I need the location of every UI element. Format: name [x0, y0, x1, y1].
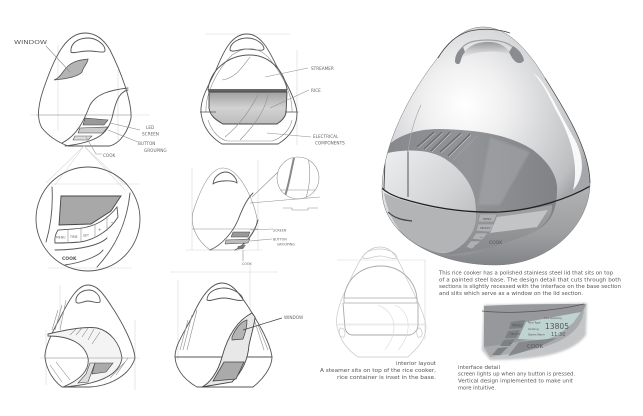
interface detail image [482, 303, 587, 360]
interface labels: MENU [512, 324, 523, 328]
interface labels: 13805 [545, 322, 569, 331]
sketch labels: led screen, button grouping, cook: GROUPING [144, 148, 167, 153]
labels: steamer, rice, electrical components: STREAMER [311, 66, 334, 71]
sketch: cooker front with window [14, 33, 150, 185]
caption: interface detail: screen lights up when any button is pressed. [458, 372, 575, 378]
description text: and slits which serve as a window on the lid section. [439, 291, 583, 297]
base slot [388, 212, 412, 221]
labels: interface buttons: TIME [69, 235, 78, 239]
sketch labels: led screen, button grouping, cook [103, 125, 167, 158]
interface screen [518, 312, 581, 340]
handle [438, 29, 524, 64]
interface labels [509, 317, 569, 350]
labels: screen, button grouping, cook: BUTTON [273, 238, 287, 242]
interface buttons [466, 214, 497, 249]
sketch labels: led screen, button grouping, cook: COOK [103, 153, 116, 158]
description text: of a painted steel base. The design detail that cuts through both [439, 278, 621, 284]
interface labels: COOK [527, 344, 543, 350]
labels: screen, button grouping, cook: GROUPING [277, 242, 295, 246]
labels: interface buttons: + [98, 227, 102, 232]
lid [390, 27, 590, 202]
interface labels: SELECT [510, 332, 521, 336]
interface labels: Time Remaining [544, 317, 562, 320]
interface buttons: + [480, 235, 483, 239]
sketch: cooker with lid window slits [40, 285, 140, 390]
sketch: cooker with vertical window [170, 265, 303, 387]
interface labels: Rice Type [528, 320, 541, 324]
labels: interface buttons: − [110, 220, 114, 225]
dark swoosh window [387, 129, 557, 246]
interface buttons: SELECT [480, 226, 491, 230]
labels: steamer, rice, electrical components: COMPONENTS [315, 140, 345, 146]
interface buttons: − [474, 243, 477, 247]
interface labels: + [509, 341, 512, 345]
interface labels: 11:30 [551, 332, 565, 338]
sketch labels: led screen, button grouping, cook: SCREEN [142, 132, 159, 136]
caption: interior layout: rice container is inset in the base. [337, 375, 436, 381]
caption: interface detail: interface detail [458, 365, 500, 371]
interface labels: Cooking [528, 327, 539, 331]
label: window: WINDOW [14, 40, 47, 46]
seam line [380, 185, 592, 212]
labels: steamer, rice, electrical components: RICE [311, 88, 321, 93]
sketch labels: led screen, button grouping, cook: LED [146, 125, 154, 130]
caption: interior layout [320, 361, 436, 381]
description text [438, 270, 621, 297]
labels: screen, button grouping, cook: COOK [242, 262, 252, 266]
detail circle [277, 157, 320, 199]
caption: interior layout: A steamer sits on top of the rice cooker, [320, 368, 436, 374]
inner shade below horizon [384, 193, 476, 252]
interface panel [78, 363, 113, 383]
labels: interface buttons: SET [83, 234, 89, 238]
sketch: small cooker side view with detail circle [186, 157, 320, 266]
labels: steamer, rice, electrical components [311, 66, 345, 146]
base interface panel [445, 205, 552, 255]
interface buttons [492, 320, 525, 355]
interface screen [490, 210, 548, 233]
interface labels: Steam Warm [528, 332, 545, 336]
labels: interface buttons: MENU [56, 236, 66, 240]
sketch: cutaway with steamer and rice [200, 34, 345, 146]
interface buttons: MENU [483, 217, 491, 221]
description text: sections is slightly recessed with the interface on the base section [439, 284, 621, 290]
vertical seam lines [384, 150, 408, 197]
sketch: interface close-up circle [36, 146, 140, 271]
label: cook: COOK [62, 256, 77, 262]
base [396, 188, 590, 265]
caption: interface detail: Vertical design implemented to make unit [458, 378, 573, 384]
caption: interface detail [458, 365, 575, 392]
label: window: WINDOW [284, 315, 303, 320]
labels: interface buttons [56, 220, 114, 240]
description text: This rice cooker has a polished stainless steel lid that sits on top [438, 270, 614, 276]
interface button row [55, 207, 118, 243]
body outline [382, 27, 590, 265]
label: cook: COOK [489, 240, 503, 246]
labels: steamer, rice, electrical components: ELECTRICAL [313, 134, 339, 139]
light inner cut [381, 150, 476, 253]
labels: screen, button grouping, cook [242, 228, 295, 266]
window reflections [478, 137, 530, 205]
caption: interface detail: more intuitive. [458, 386, 496, 392]
labels: screen, button grouping, cook: SCREEN [273, 228, 287, 232]
highlight: right rim [533, 73, 582, 190]
sketch labels: led screen, button grouping, cook: BUTTON [138, 141, 155, 146]
interior layout line drawing [336, 247, 426, 357]
rendered rice cooker [375, 20, 595, 270]
slits [417, 132, 477, 160]
caption: interior layout: interior layout [396, 361, 436, 367]
